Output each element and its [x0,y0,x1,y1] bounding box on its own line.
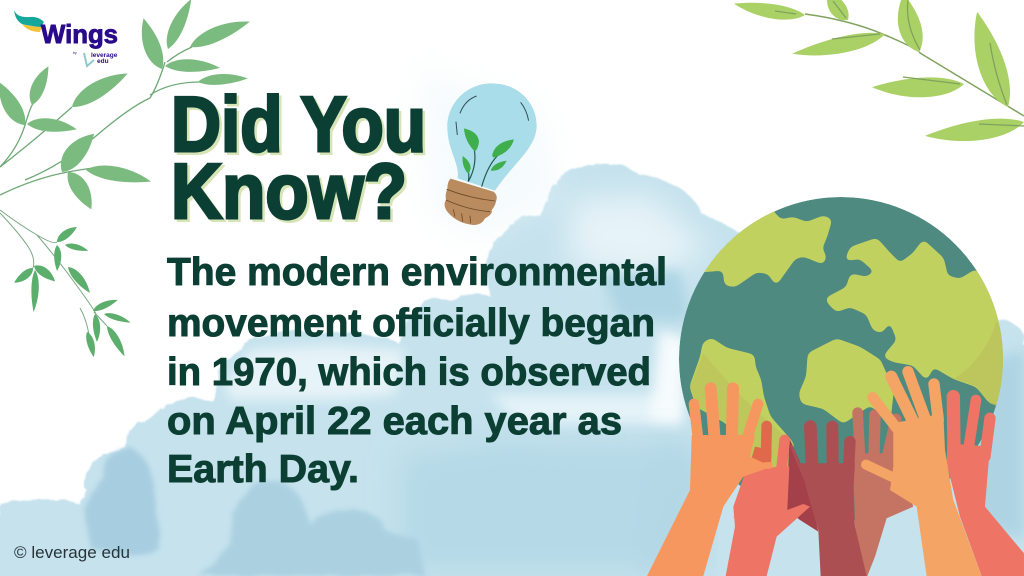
globe shading [956,320,1003,406]
logo swoosh [14,10,44,32]
title: Did You Know?: Know? [174,150,410,238]
hand: coral right [947,397,1024,576]
cloud mid patches [600,270,690,320]
bulb glass [447,83,537,191]
hand: orange left [647,388,772,576]
body text: movement officially began [167,302,655,345]
hand: back dark orange [733,426,772,518]
globe ocean [679,197,1003,521]
cloud light patches [570,195,710,280]
footer credit: leverage edu: © leverage edu [14,544,130,562]
globe continents [690,212,1003,468]
title: Did You Know?: Did You [171,80,426,168]
hand: rose [853,413,913,576]
logo: Wings by leverage edu: edu [97,58,109,65]
body text: on April 22 each year as [167,400,622,443]
icon: light bulb with plant [445,83,537,225]
bulb highlights [456,96,529,135]
body text: The modern environmental [167,251,667,294]
body text [167,251,667,491]
logo byline: by [73,51,77,55]
body text: Earth Day. [167,448,359,491]
hand: coral left [726,440,810,576]
hand: red [792,427,867,576]
plant leaves [463,128,514,174]
hand: back rose shade [787,438,818,532]
globe [679,197,1013,521]
body text: in 1970, which is observed [167,351,651,394]
cloud edge fill [0,345,1024,576]
logo leverage edu: leverage [91,52,118,59]
bulb screw base [445,179,497,225]
title: Did You Know?: Know? [171,147,407,235]
cloud dark lobes [85,447,160,556]
title: Did You Know?: Did You [174,82,428,170]
globe and hands illustration [647,197,1024,576]
plant stems [467,145,500,187]
title: Did You Know? [171,80,428,238]
branch: top right leaves [733,0,1024,148]
logo wordmark: Wings [41,19,118,49]
hand: orange right [866,372,982,576]
branch: upper left leaves [0,0,252,213]
cloud base [0,163,1024,576]
logo: Wings by leverage edu [14,10,118,66]
branch: lower left leaves [0,210,132,358]
logo mark [84,53,94,66]
